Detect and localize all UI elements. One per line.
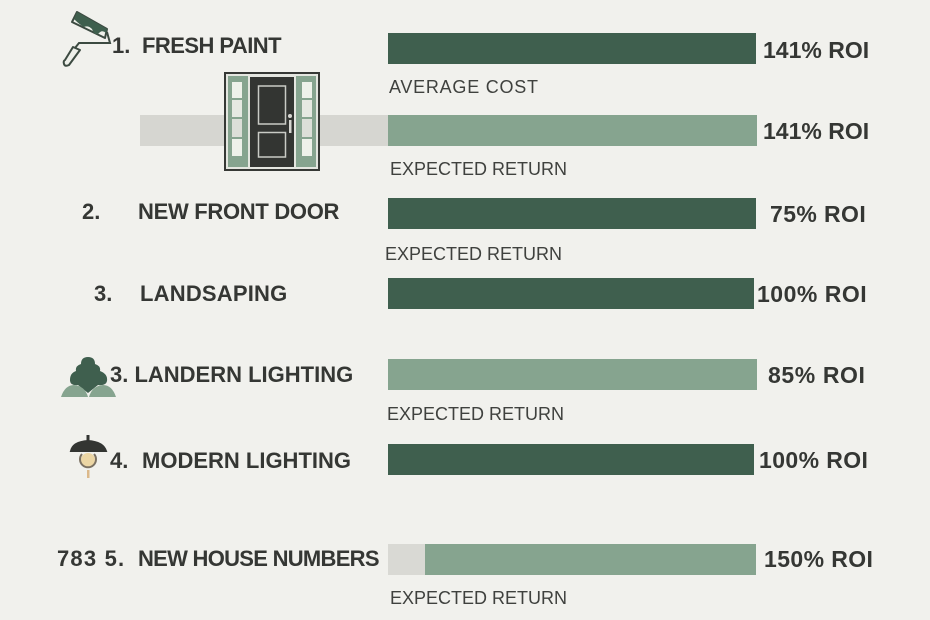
bar: new front door [388,198,756,229]
title text: fresh paint: FRESH PAINT [142,33,281,58]
title text: new house numbers: NEW HOUSE NUMBERS [138,546,379,571]
bar: modern lighting [388,444,754,475]
bar: new house numbers [425,544,756,575]
icon: shrub [61,357,116,397]
bar: fresh paint expected return [388,115,757,146]
title text: modern lighting: MODERN LIGHTING [142,448,351,473]
title: item 1 fresh paint: 1. [112,33,130,58]
icon: front door [224,72,320,171]
bar: new house numbers track [388,544,425,575]
bar: landern lighting [388,359,757,390]
title: item 5 number: 783 5. [57,546,125,571]
title: item 2 number: 2. [82,199,100,224]
value: 100% ROI: 100% ROI [757,281,867,307]
value: 150% ROI: 150% ROI [764,546,873,572]
value: 141% ROI: 141% ROI [763,37,869,63]
title: item 4 number: 4. [110,448,128,473]
label: expected return 4: EXPECTED RETURN [390,588,567,608]
value: 100% ROI second: 100% ROI [759,447,868,473]
label: expected return 2: EXPECTED RETURN [385,244,562,264]
title text: new front door: NEW FRONT DOOR [138,199,339,224]
label: average cost: AVERAGE COST [389,77,539,97]
icon: paint roller [62,11,112,67]
value: 85% ROI: 85% ROI [768,362,866,388]
label: expected return 3: EXPECTED RETURN [387,404,564,424]
label: expected return 1: EXPECTED RETURN [390,159,567,179]
value: 75% ROI: 75% ROI [770,201,866,227]
title: item 3 number: 3. [94,281,112,306]
bar: fresh paint average cost [388,33,756,64]
bar: landsaping [388,278,754,309]
value: 141% ROI second: 141% ROI [763,118,869,144]
icon: pendant lamp [70,435,108,478]
title: item 3 landern lighting: 3. LANDERN LIGHTING [110,362,353,387]
title text: landsaping: LANDSAPING [140,281,287,306]
bar: grey track [140,115,388,146]
